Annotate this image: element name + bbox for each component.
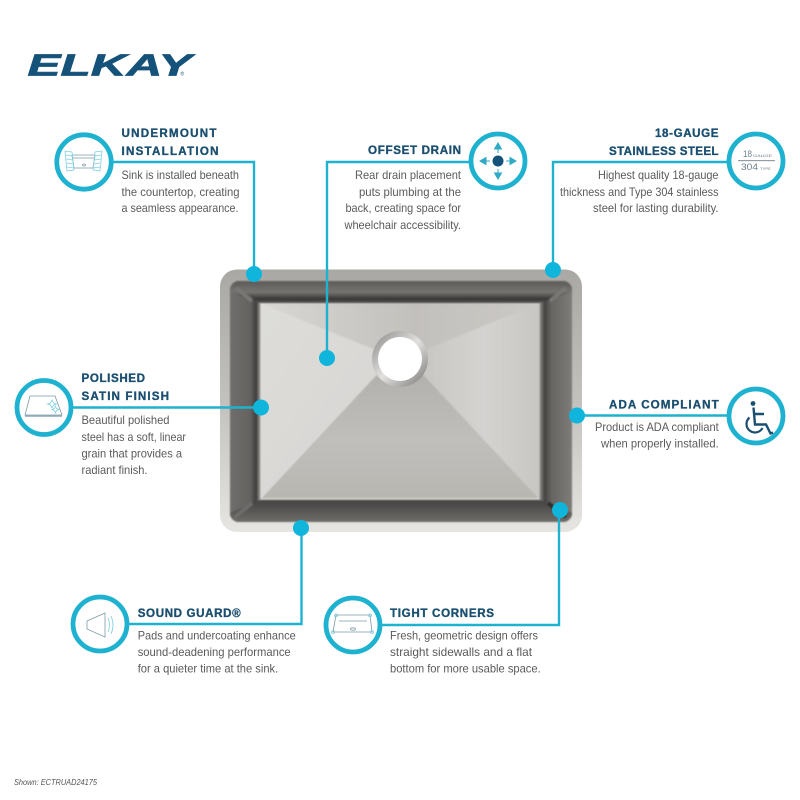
description: Beautiful polished [82, 413, 170, 427]
description: Rear drain placement [355, 168, 462, 182]
marker dot [253, 400, 269, 416]
description: puts plumbing at the [359, 185, 461, 199]
description: wheelchair accessibility. [344, 218, 461, 232]
heading [122, 127, 218, 158]
leader line [72, 406, 261, 409]
description: a seamless appearance. [122, 201, 238, 215]
sink drain [372, 331, 428, 387]
icon: drain with arrows [471, 134, 525, 188]
heading: INSTALLATION [122, 145, 218, 158]
leader line [113, 162, 254, 274]
icon: speaker [73, 597, 127, 651]
description: radiant finish. [82, 463, 148, 477]
footnote: model shown: Shown: ECTRUAD24175 [14, 777, 97, 787]
callout: tight corners [326, 502, 568, 676]
icon: undermount sink [57, 135, 111, 189]
description: grain that provides a [82, 446, 182, 460]
sink basin walls [230, 281, 572, 522]
leader line [129, 528, 302, 624]
sink rim [220, 270, 582, 532]
leader line [553, 162, 728, 270]
sink floor panels [260, 303, 540, 500]
callout: ADA compliant [569, 389, 783, 450]
logo: Elkay [28, 49, 196, 83]
description: straight sidewalls and a flat [390, 645, 533, 659]
icon: gauge label: GAUGE [753, 153, 772, 158]
heading [609, 127, 719, 158]
description: for a quieter time at the sink. [138, 662, 278, 676]
callout: polished satin finish [17, 372, 269, 477]
icon: gauge label: TYPE [760, 166, 771, 171]
icon: polished sheet [17, 380, 71, 434]
marker dot [545, 262, 561, 278]
leader line [577, 414, 728, 417]
heading: POLISHED [82, 372, 145, 385]
description: steel for lasting durability. [593, 201, 718, 215]
callout: 18-gauge stainless steel [545, 127, 783, 278]
logo: Elkay: ELKAY [28, 49, 196, 83]
heading: SOUND GUARD® [138, 607, 241, 620]
heading: OFFSET DRAIN [368, 144, 461, 157]
description [344, 168, 462, 232]
leader line [382, 510, 559, 625]
heading: SATIN FINISH [82, 390, 169, 403]
heading: 18-GAUGE [655, 127, 719, 140]
heading: STAINLESS STEEL [609, 145, 718, 158]
heading: ADA COMPLIANT [609, 398, 719, 412]
callout: offset drain [319, 134, 525, 366]
description: Pads and undercoating enhance [138, 628, 296, 642]
description: Highest quality 18-gauge [598, 168, 719, 182]
callout: sound guard [73, 520, 309, 676]
description: Product is ADA compliant [595, 420, 719, 434]
description: when properly installed. [600, 436, 719, 450]
description [138, 628, 296, 676]
logo: Elkay: ® [180, 70, 184, 78]
heading [82, 372, 169, 403]
description: steel has a soft, linear [82, 430, 186, 444]
description [122, 168, 240, 215]
description: bottom for more usable space. [390, 662, 541, 676]
marker dot [246, 266, 262, 282]
description [560, 168, 719, 215]
heading: UNDERMOUNT [122, 127, 216, 140]
description [390, 628, 541, 676]
marker dot [569, 408, 585, 424]
description: sound-deadening performance [138, 645, 291, 659]
description: Sink is installed beneath [122, 168, 239, 182]
icon: wheelchair [729, 389, 783, 443]
callout: undermount installation [57, 127, 262, 282]
marker dot [293, 520, 309, 536]
icon: sink corners [326, 598, 380, 652]
icon: gauge label: 18 [743, 149, 752, 160]
description: back, creating space for [346, 201, 461, 215]
description [82, 413, 186, 477]
icon: gauge label: 304 [741, 162, 758, 173]
sink photograph [220, 270, 582, 532]
description: thickness and Type 304 stainless [560, 185, 718, 199]
heading: TIGHT CORNERS [390, 607, 494, 620]
description: the countertop, creating [122, 185, 240, 199]
description: Fresh, geometric design offers [390, 628, 538, 642]
description [595, 420, 719, 450]
marker dot [552, 502, 568, 518]
marker dot [319, 350, 335, 366]
leader line [327, 162, 469, 358]
icon: gauge label [729, 134, 783, 188]
